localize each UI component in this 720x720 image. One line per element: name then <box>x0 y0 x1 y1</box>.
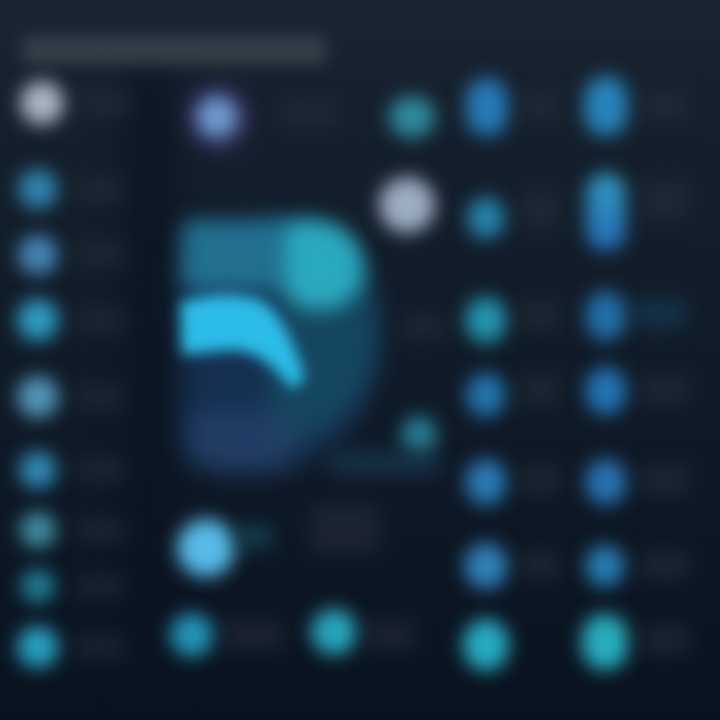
label text <box>75 308 125 332</box>
label text <box>640 625 690 655</box>
icon: blue pill 1 <box>466 78 508 136</box>
icon: teal node 6 <box>20 512 56 548</box>
label text <box>310 505 380 553</box>
icon: gradient pill 2 <box>586 173 626 251</box>
label text <box>75 178 125 202</box>
label text <box>75 458 125 482</box>
icon: teal node 8 <box>17 626 59 668</box>
label strip <box>330 452 440 474</box>
label text <box>280 100 340 126</box>
chart bright wave segment <box>170 286 313 396</box>
background dark band <box>125 70 175 690</box>
chart ring <box>270 218 378 443</box>
accent strip <box>236 525 272 549</box>
label text <box>75 385 125 409</box>
label text <box>520 300 560 330</box>
chart lower band <box>188 412 293 468</box>
label text <box>640 465 690 495</box>
label text <box>75 518 125 542</box>
label text <box>640 180 690 220</box>
icon: bright blue node <box>177 519 235 577</box>
icon: blue node 5 <box>19 451 57 489</box>
icon: blue node 1 <box>18 169 58 209</box>
label text <box>80 90 130 116</box>
label text <box>640 375 690 405</box>
icon: teal node 7 <box>582 614 628 670</box>
icon: teal node 2 <box>467 197 505 239</box>
icon: blue node 5 <box>585 459 627 505</box>
label text <box>75 242 125 266</box>
icon: blue node 6 <box>585 545 625 587</box>
icon: blue node 4 <box>466 373 506 417</box>
icon: blue node 2 <box>18 235 58 275</box>
label text <box>520 190 560 230</box>
icon: teal bottom node 1 <box>170 613 214 657</box>
icon: teal node 7 <box>21 569 55 603</box>
icon: white node <box>20 81 64 125</box>
icon: blue node 6 <box>464 543 508 589</box>
label text <box>640 550 690 580</box>
icon: white node centre <box>379 177 435 233</box>
chart upper right segment <box>282 220 364 310</box>
icon: teal bottom node 2 <box>311 609 357 655</box>
label text <box>520 550 560 580</box>
icon: blue node 3 <box>17 299 59 341</box>
panel: central chart <box>166 204 392 486</box>
icon: teal node lower <box>401 416 437 454</box>
icon: teal node 3 <box>465 297 507 343</box>
label text <box>640 90 690 120</box>
label text <box>520 465 560 495</box>
icon: teal node top <box>389 96 435 138</box>
icon: lavender node core <box>197 97 237 137</box>
label text <box>222 620 284 650</box>
icon: blue node 4 <box>585 367 627 415</box>
icon: blue node 4 <box>17 376 59 418</box>
label text <box>520 375 560 405</box>
chart upper left segment <box>182 220 287 290</box>
label text <box>75 575 125 597</box>
label text <box>365 620 415 650</box>
label text <box>520 90 560 120</box>
chart base shape <box>182 230 372 470</box>
panel: column five <box>568 64 690 682</box>
small text <box>400 315 446 339</box>
label text <box>75 635 125 659</box>
title bar <box>22 36 326 64</box>
icon: blue node 3 <box>585 291 627 341</box>
icon: blue pill 1 <box>584 76 628 136</box>
accent strip <box>632 300 686 328</box>
icon: teal node 7 <box>463 619 509 671</box>
icon: blue node 5 <box>465 459 507 505</box>
panel: column four <box>450 66 556 684</box>
panel: center nodes <box>158 78 448 669</box>
icon: lavender node <box>188 86 248 150</box>
panel: left column <box>4 69 119 680</box>
